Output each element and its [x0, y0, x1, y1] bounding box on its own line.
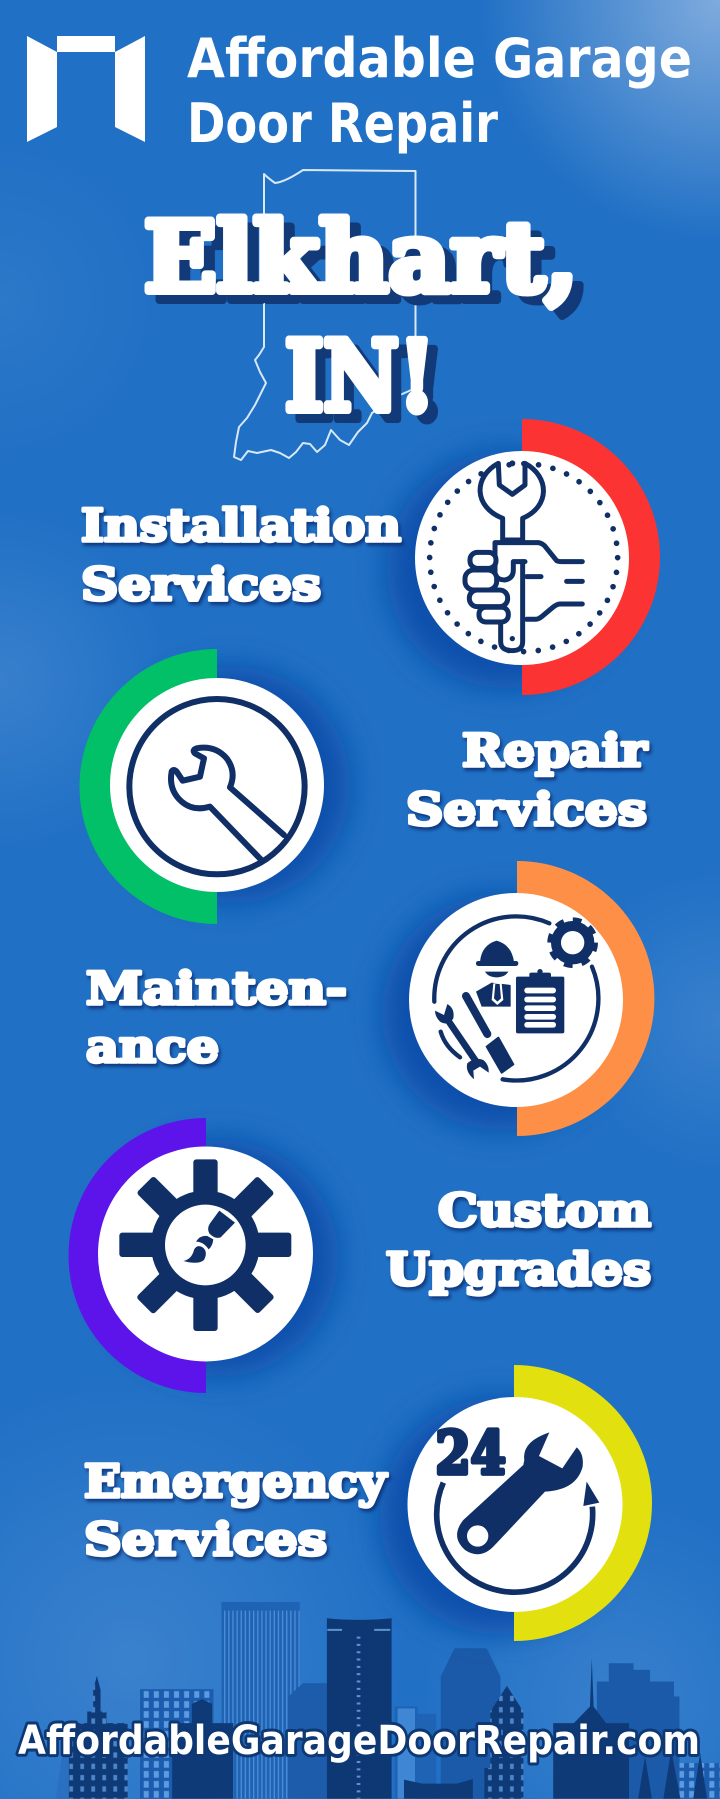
company name: Door Repair	[187, 92, 498, 155]
city heading: Elkhart,	[155, 210, 589, 323]
glow shadows behind circles	[102, 452, 623, 1634]
service label: repair: Repair	[462, 724, 648, 777]
service label: custom upgrades	[386, 1184, 651, 1296]
panel: emergency services	[84, 1365, 652, 1641]
panel: installation services	[81, 419, 660, 695]
city heading: IN!	[285, 320, 435, 433]
white disc	[110, 678, 324, 892]
service label: emergency: Services	[84, 1513, 327, 1566]
city skyline	[56, 1602, 720, 1799]
city heading: Elkhart,	[144, 201, 578, 314]
green half ring	[80, 649, 217, 924]
service label: installation	[81, 499, 401, 611]
city heading	[144, 201, 589, 442]
purple half ring	[68, 1118, 206, 1393]
company name	[187, 27, 692, 155]
service label: custom upgrades: Custom	[438, 1184, 651, 1237]
icon: maintenance worker and tools	[434, 916, 598, 1080]
logo icon	[27, 36, 145, 142]
service label: installation: Services	[81, 558, 321, 611]
white disc	[415, 451, 629, 665]
service label: emergency	[84, 1455, 388, 1566]
service label: repair	[406, 724, 648, 836]
white disc	[409, 893, 623, 1107]
service label: maintenance	[86, 962, 347, 1073]
white disc	[98, 1146, 313, 1362]
Indiana state outline	[234, 170, 418, 460]
red half ring	[522, 419, 660, 695]
orange half ring	[517, 861, 654, 1136]
icon: 24 hour wrench: 24	[435, 1419, 506, 1488]
icon: 24 hour wrench	[435, 1419, 599, 1592]
icon: wrench in circle	[129, 699, 305, 874]
service label: maintenance: Mainten-	[86, 962, 347, 1015]
city heading: IN!	[295, 329, 445, 442]
service label: custom upgrades: Upgrades	[386, 1243, 651, 1296]
panel: custom upgrades	[68, 1118, 651, 1393]
service label: maintenance: ance	[86, 1020, 219, 1073]
white disc	[408, 1397, 622, 1612]
panel: repair services	[80, 649, 648, 924]
service label: installation: Installation	[81, 499, 401, 552]
icon: gear with paintbrush	[119, 1159, 291, 1331]
service label: emergency: Emergency	[84, 1455, 388, 1508]
icon: hand holding wrench	[430, 460, 618, 652]
panel: maintenance	[86, 861, 654, 1136]
yellow half ring	[514, 1365, 652, 1641]
service label: repair: Services	[406, 783, 647, 836]
